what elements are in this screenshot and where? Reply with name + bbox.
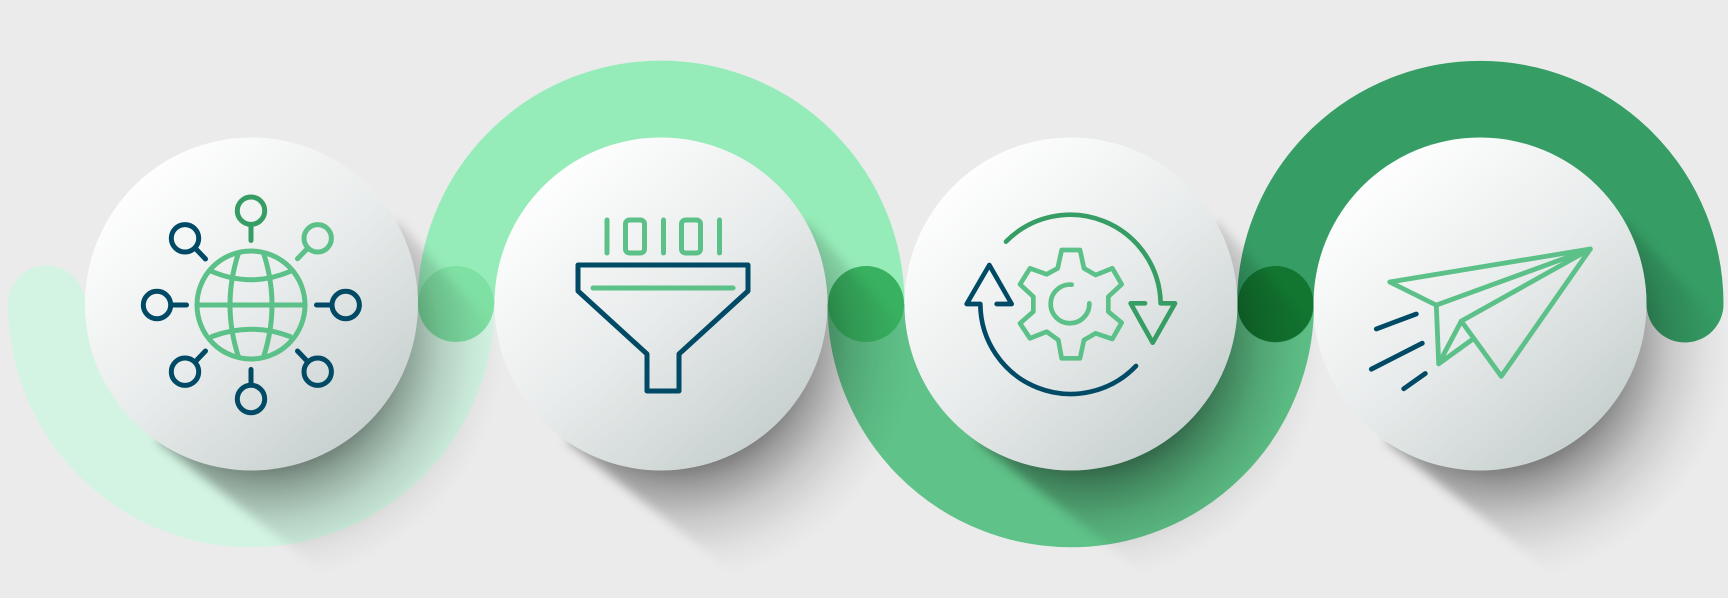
magnifier bottom right xyxy=(298,351,331,385)
magnifier left xyxy=(143,291,186,319)
connector dot 2 xyxy=(828,266,904,342)
green cycle arrow xyxy=(1006,215,1175,343)
connector dot 1 xyxy=(418,266,494,342)
icon: paper plane xyxy=(1371,249,1590,389)
icon: gear with cycle arrows xyxy=(967,215,1175,394)
disc 2 xyxy=(494,138,828,470)
magnifier bottom left xyxy=(171,351,206,385)
shadow: disc 2 xyxy=(566,221,906,574)
disc 1 xyxy=(85,138,418,470)
magnifier top right xyxy=(298,225,331,259)
disc 4 xyxy=(1314,138,1646,470)
gear xyxy=(1020,250,1122,358)
connector dot 3 xyxy=(1238,266,1314,342)
shadow: disc 3 xyxy=(976,221,1316,574)
gear centre arc xyxy=(1051,285,1089,323)
disc 3 xyxy=(904,138,1238,470)
magnifier top xyxy=(237,197,265,240)
navy cycle arrow xyxy=(967,265,1136,394)
speed lines xyxy=(1371,314,1425,389)
ribbon arc 3 xyxy=(866,304,1276,509)
magnifier top left xyxy=(171,225,206,259)
shadow: disc 1 xyxy=(156,221,496,574)
icon: data funnel xyxy=(578,220,748,391)
plane xyxy=(1390,249,1590,376)
funnel outline xyxy=(578,265,748,391)
icon: globe with magnifiers xyxy=(143,197,359,413)
binary digits xyxy=(607,220,720,253)
ribbon arc 1 xyxy=(46,304,456,509)
globe xyxy=(197,251,305,359)
funnel level line xyxy=(593,286,733,290)
shadow: disc 4 xyxy=(1385,221,1725,574)
magnifier bottom xyxy=(237,370,265,413)
magnifier right xyxy=(316,291,359,319)
ribbon arc 4 xyxy=(1276,99,1685,304)
ribbon arc 2 xyxy=(456,99,866,304)
